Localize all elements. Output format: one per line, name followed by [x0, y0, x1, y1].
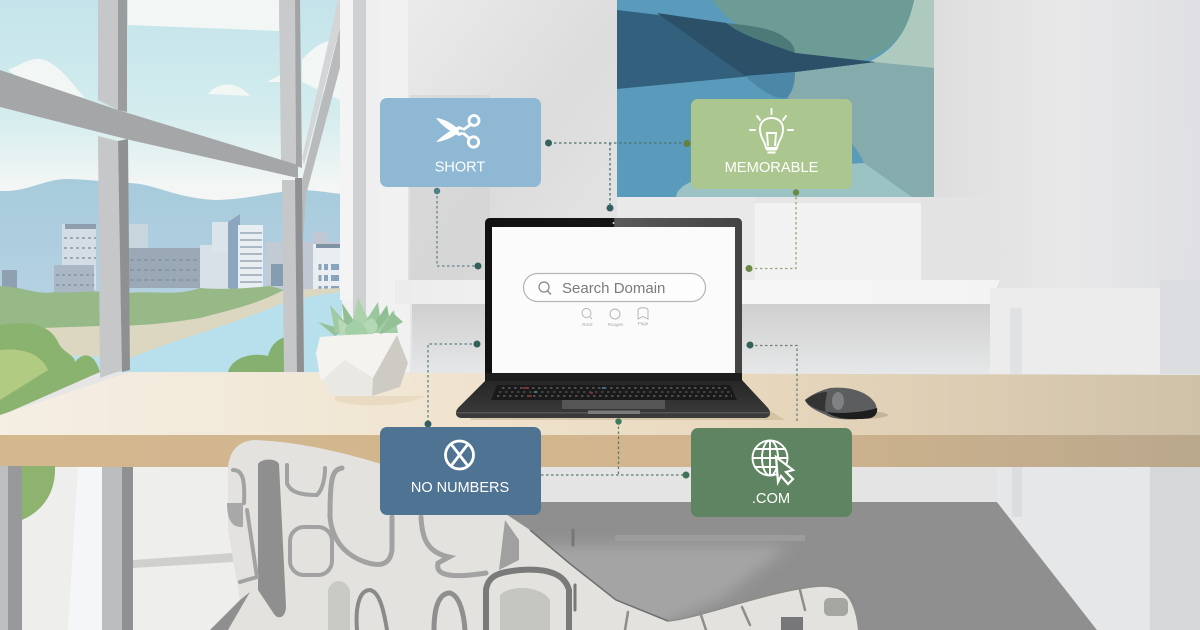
area below desk [0, 466, 1200, 630]
icon: scissors [436, 116, 479, 147]
city buildings [2, 214, 341, 344]
connector: memorable to laptop [746, 189, 799, 272]
mouse [805, 388, 888, 419]
desk [0, 372, 1200, 467]
card: memorable [691, 99, 852, 189]
connector: laptop to com and no numbers [541, 418, 690, 478]
small option labels: Rock [582, 322, 593, 327]
card: no numbers [380, 427, 541, 515]
chair fabric pattern [227, 460, 848, 630]
river and shore [60, 340, 342, 372]
front notch [588, 410, 640, 414]
icon: crossed circle [446, 441, 474, 469]
keyboard [491, 385, 737, 400]
laptop base [456, 380, 770, 418]
trackpad [562, 400, 665, 409]
card: short [380, 98, 541, 187]
icon: magnifier [539, 282, 551, 294]
card: no numbers: NO NUMBERS [411, 480, 509, 496]
window frame [0, 0, 380, 378]
small option labels [582, 321, 649, 327]
small option labels: Page [638, 321, 649, 326]
laptop screen [492, 227, 735, 373]
connector: short to memorable and laptop camera [545, 140, 690, 212]
icon: globe with cursor [752, 440, 793, 484]
pot shadow [335, 392, 425, 406]
search bar [524, 274, 706, 302]
clouds [8, 0, 340, 100]
connector: short to laptop [434, 188, 482, 270]
succulent leaves [318, 298, 403, 336]
connector: com to laptop [746, 342, 797, 423]
laptop base shadow [470, 395, 785, 420]
laptop [456, 218, 785, 420]
pot [316, 333, 408, 396]
plant in geometric pot [316, 298, 425, 406]
card: memorable: MEMORABLE [725, 160, 819, 176]
distant hills [0, 179, 342, 350]
card: short: SHORT [435, 160, 485, 176]
chair [210, 440, 858, 630]
search bar: Search Domain [562, 280, 665, 297]
icon: light bulb [750, 109, 793, 152]
trees [0, 286, 284, 336]
wall painting [617, 0, 934, 197]
card: .com: .COM [752, 491, 790, 507]
connector: no numbers to laptop [424, 340, 480, 428]
small option icons [582, 308, 648, 319]
small option labels: Rouges [608, 322, 624, 327]
card: .com [691, 428, 852, 517]
laptop lid [485, 218, 742, 381]
window view: sky, hills and city [0, 0, 380, 416]
